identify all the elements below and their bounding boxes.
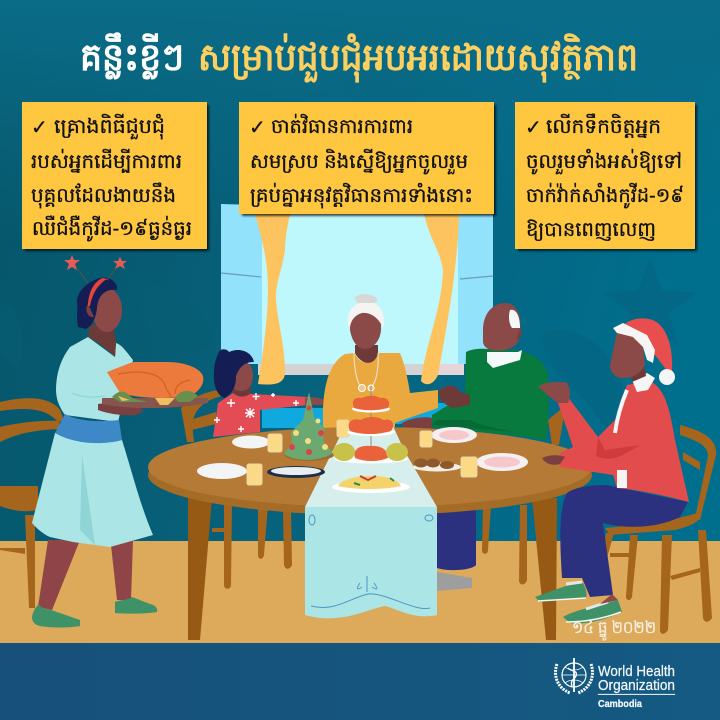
title: សម្រាប់ជួបជុំអបអរដោយសុវត្ថិភាព <box>198 33 638 83</box>
face <box>350 312 381 349</box>
tip box 1: ✓ <box>31 115 48 139</box>
neck <box>88 325 116 357</box>
chair <box>600 425 716 634</box>
tip box 2: ✓ <box>249 115 266 139</box>
girl's chair <box>181 390 292 589</box>
face <box>610 332 646 382</box>
man in santa hat <box>535 318 716 634</box>
older man's trousers and shoe <box>437 505 476 591</box>
trousers <box>560 485 688 597</box>
tip box 1: របស់អ្នកដើម្បីការពារ <box>31 148 182 173</box>
antenna headband <box>64 255 127 283</box>
tip box 2: សមស្រប និងស្នើឱ្យអ្នកចូលរួម <box>250 148 468 175</box>
hand on table <box>402 417 432 430</box>
title <box>80 32 638 83</box>
blue chair behind <box>392 403 452 424</box>
necklace <box>354 353 378 388</box>
table <box>148 427 592 640</box>
WHO wordmark: Organization <box>598 677 675 694</box>
WHO wordmark: World Health <box>598 663 675 680</box>
tip box 1: ឈឺជំងឺកូវីដ-១៩ធ្ងន់ធ្ងរ <box>32 215 192 242</box>
WHO logo <box>556 658 675 710</box>
neck <box>355 345 378 363</box>
WHO wordmark: Cambodia <box>598 698 642 710</box>
girl <box>213 349 328 437</box>
sweater and arms <box>557 373 689 502</box>
cookies <box>413 458 461 472</box>
date: ១៤ ធ្នូ ២០២២ <box>572 618 656 641</box>
table top <box>148 427 592 515</box>
tip box 1: គ្រោងពិធីជួបជុំ <box>54 113 165 140</box>
floor <box>0 541 720 644</box>
shoes <box>535 582 622 623</box>
head <box>77 278 122 332</box>
clasped hands <box>438 386 470 408</box>
platter with turkey <box>102 362 208 408</box>
glasses <box>247 420 477 485</box>
tip box 1: បុគ្គលដែលងាយនឹង <box>31 182 176 209</box>
dress <box>32 337 153 547</box>
christmas tree <box>284 392 334 461</box>
older man in green sweater <box>432 303 549 440</box>
white hair <box>348 302 384 328</box>
window with curtains <box>221 204 493 385</box>
tip box 2: គ្រប់គ្នាអនុវត្តវិធានការទាំងនោះ <box>250 182 473 209</box>
tip box 3: ឱ្យបានពេញលេញ <box>526 219 656 241</box>
man's chair <box>482 410 565 584</box>
title: គន្លឹះខ្លីៗ <box>80 32 184 80</box>
older woman <box>323 294 452 428</box>
table runner <box>305 426 437 618</box>
arm and hand <box>98 403 143 415</box>
yellow top with arm <box>323 353 438 428</box>
WHO emblem <box>556 658 592 693</box>
plates <box>197 427 528 493</box>
WHO wordmark <box>598 663 675 710</box>
legs and shoes <box>32 540 157 628</box>
woman carrying turkey <box>32 255 208 628</box>
footer band <box>0 643 720 720</box>
tip box 2: ចាត់វិធានការការពារ <box>271 113 413 138</box>
tiered cake stand <box>333 386 408 464</box>
tip box 1 <box>22 102 209 251</box>
tableware <box>197 386 528 493</box>
tip box 3: លើកទឹកចិត្តអ្នក <box>546 113 661 138</box>
table legs <box>188 498 557 640</box>
tip box 2 <box>239 102 496 216</box>
santa hat <box>613 318 675 385</box>
tip box 3: ចាក់វ៉ាក់សាំងកូវីដ-១៩ <box>526 182 684 209</box>
tip box 3: ចូលរួមទាំងអស់ឱ្យទៅ <box>526 148 682 175</box>
tip box 3: ✓ <box>525 115 542 139</box>
tip box 3 <box>515 102 697 251</box>
left chair <box>0 398 64 608</box>
hands <box>538 382 570 403</box>
